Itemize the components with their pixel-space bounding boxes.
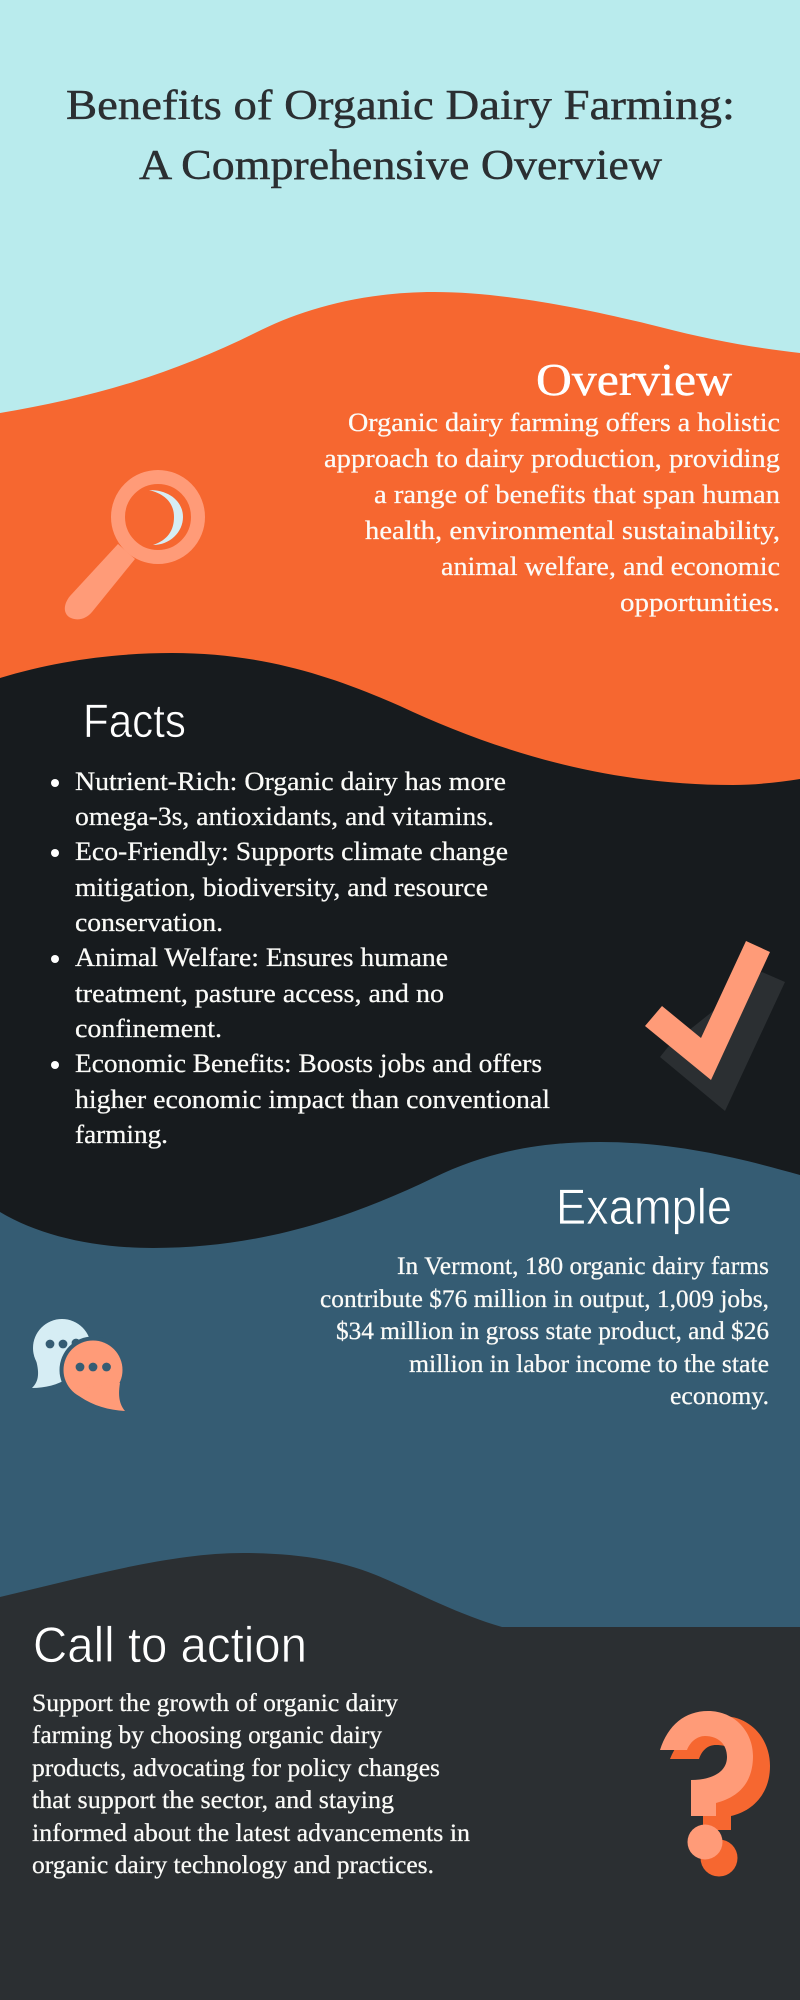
bullet: animal welfare [51, 943, 448, 1043]
icon: magnifying glass [65, 477, 198, 619]
bullet: eco-friendly: Eco-Friendly: Supports climate change [75, 837, 508, 866]
text block: call to action: organic dairy technology and practices. [32, 1852, 434, 1879]
heading: overview: Overview [536, 354, 733, 405]
heading: example: Example [556, 1179, 732, 1235]
bullet: animal welfare: treatment, pasture access, and no [75, 979, 444, 1008]
bullet: eco-friendly: conservation. [75, 908, 223, 937]
bullet: economic benefits [51, 1049, 550, 1149]
bullet: nutrient-rich: Nutrient-Rich: Organic dairy has more [75, 767, 506, 796]
text block: overview: approach to dairy production, providing [324, 444, 780, 473]
icon: chat bubbles [32, 1319, 126, 1411]
bullet: economic benefits: Economic Benefits: Boosts jobs and offers [75, 1049, 542, 1078]
bullet: animal welfare: Animal Welfare: Ensures humane [75, 943, 448, 972]
panel: title [0, 0, 800, 420]
text block: overview: health, environmental sustainability, [365, 516, 780, 545]
title: A Comprehensive Overview [139, 143, 663, 189]
title [66, 83, 735, 189]
text block: call to action: farming by choosing organic dairy [32, 1722, 382, 1749]
text block: overview [324, 408, 780, 617]
icon: question mark [660, 1711, 770, 1876]
text block: call to action: informed about the latest advancements in [32, 1820, 471, 1847]
panel: example [0, 1142, 800, 1630]
bullet: economic benefits: higher economic impact than conventional [75, 1085, 550, 1114]
panel: call to action [0, 1553, 800, 2000]
title: Benefits of Organic Dairy Farming: [66, 83, 735, 129]
text block: overview: a range of benefits that span human [374, 480, 780, 509]
text block: example: contribute $76 million in output, 1,009 jobs, [320, 1286, 769, 1313]
text block: call to action: Support the growth of organic dairy [32, 1690, 399, 1717]
text block: overview: animal welfare, and economic [441, 552, 780, 581]
panel: overview [0, 292, 800, 790]
bullet: eco-friendly [51, 837, 508, 937]
text block: call to action [32, 1690, 471, 1879]
heading: facts: Facts [83, 694, 186, 747]
bullet: economic benefits: farming. [75, 1120, 168, 1149]
text block: example [320, 1253, 769, 1410]
text block: example: million in labor income to the state [409, 1351, 769, 1378]
panel: facts [0, 653, 800, 1250]
bullet: animal welfare: confinement. [75, 1014, 222, 1043]
heading: call to action: Call to action [33, 1617, 307, 1673]
bullet: eco-friendly: mitigation, biodiversity, and resource [75, 873, 488, 902]
text block: example: In Vermont, 180 organic dairy farms [397, 1253, 769, 1280]
icon: check mark [645, 941, 785, 1111]
text block: overview: Organic dairy farming offers a holistic [348, 408, 780, 437]
text block: example: economy. [670, 1383, 769, 1410]
text block: call to action: that support the sector, and staying [32, 1787, 395, 1814]
text block: overview: opportunities. [620, 588, 780, 617]
text block: call to action: products, advocating for policy changes [32, 1755, 440, 1782]
bullet: nutrient-rich: omega-3s, antioxidants, and vitamins. [75, 802, 494, 831]
list: facts [51, 767, 550, 1149]
bullet: nutrient-rich [51, 767, 506, 831]
text block: example: $34 million in gross state product, and $26 [336, 1318, 769, 1345]
